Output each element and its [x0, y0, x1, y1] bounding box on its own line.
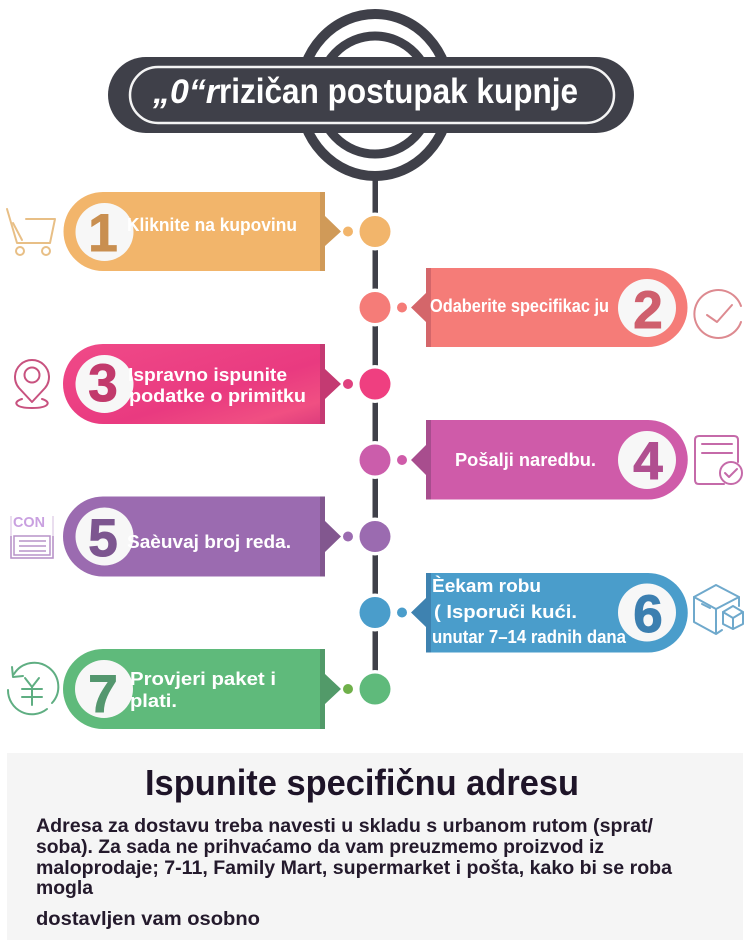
connector dots [397, 608, 407, 618]
body text [36, 816, 672, 930]
banner [64, 192, 325, 271]
banner [63, 496, 325, 576]
banner [63, 344, 325, 424]
connector dots [343, 684, 353, 694]
label: podatke o primitku [129, 386, 306, 406]
step 3 [15, 344, 394, 424]
title badge [108, 14, 634, 176]
icon: yuan refund [8, 663, 58, 714]
banner [426, 268, 688, 347]
label: Èekam robu [432, 575, 541, 596]
title text: „0“r [152, 73, 221, 111]
number [76, 355, 134, 413]
step 4 [356, 420, 742, 500]
connector dots [343, 379, 353, 389]
title pill [108, 57, 634, 133]
panel: address note [7, 753, 743, 940]
title text: rizičan postupak kupnje [219, 72, 578, 111]
label: Provjeri paket i [130, 669, 276, 689]
step 2 [356, 268, 741, 347]
icon: order form CON: CON [13, 514, 45, 531]
icon: parcels [694, 585, 743, 634]
step 3: 3 [88, 354, 118, 413]
body text: soba). Za sada ne prihvaćamo da vam preuzmemo proizvod iz [36, 837, 604, 858]
label [432, 575, 627, 647]
number [618, 431, 676, 489]
concentric rings [300, 14, 450, 176]
number [618, 279, 676, 337]
icon: document with check [695, 436, 742, 484]
number [76, 203, 134, 261]
label: Saèuvaj broj reda. [127, 532, 291, 552]
label: Ispravno ispunite [128, 365, 287, 385]
step 5: 5 [88, 509, 118, 568]
label: Pošalji naredbu. [455, 450, 596, 470]
icon: check circle [694, 290, 741, 338]
step 6: 6 [633, 585, 663, 644]
number [76, 508, 134, 566]
connector dots [397, 302, 407, 312]
number [618, 584, 676, 642]
step 5 [11, 496, 394, 576]
icon: shopping cart [7, 209, 55, 255]
number [75, 660, 133, 718]
body text: Adresa za dostavu treba navesti u skladu s urbanom rutom (sprat/ [36, 816, 654, 837]
body text: dostavljen vam osobno [36, 909, 260, 930]
label: Odaberite specifikac ju [430, 296, 609, 316]
step 2: 2 [633, 281, 663, 340]
step 1 [7, 192, 394, 271]
timeline line [372, 178, 378, 673]
connector dots [397, 455, 407, 465]
icon: order form CON [11, 514, 53, 558]
icon: location pin [15, 360, 49, 408]
banner [426, 420, 688, 500]
step 6 [356, 573, 743, 652]
step 7 [8, 649, 394, 729]
label: ( Isporuči kući. [434, 602, 577, 622]
label: unutar 7–14 radnih dana [432, 627, 627, 647]
body text: maloprodaje; 7-11, Family Mart, supermarket i pošta, kako bi se roba [36, 858, 672, 879]
step 7: 7 [88, 665, 118, 724]
connector dots [343, 532, 353, 542]
banner [63, 649, 325, 729]
banner [426, 573, 688, 652]
step 4: 4 [633, 432, 663, 491]
connector dots [343, 226, 353, 236]
label [130, 669, 276, 711]
body text: mogla [36, 878, 93, 899]
step 1: 1 [88, 204, 118, 263]
label: Kliknite na kupovinu [127, 215, 297, 235]
heading: Ispunite specifičnu adresu [145, 762, 579, 803]
label [128, 365, 306, 406]
label: plati. [130, 691, 177, 711]
